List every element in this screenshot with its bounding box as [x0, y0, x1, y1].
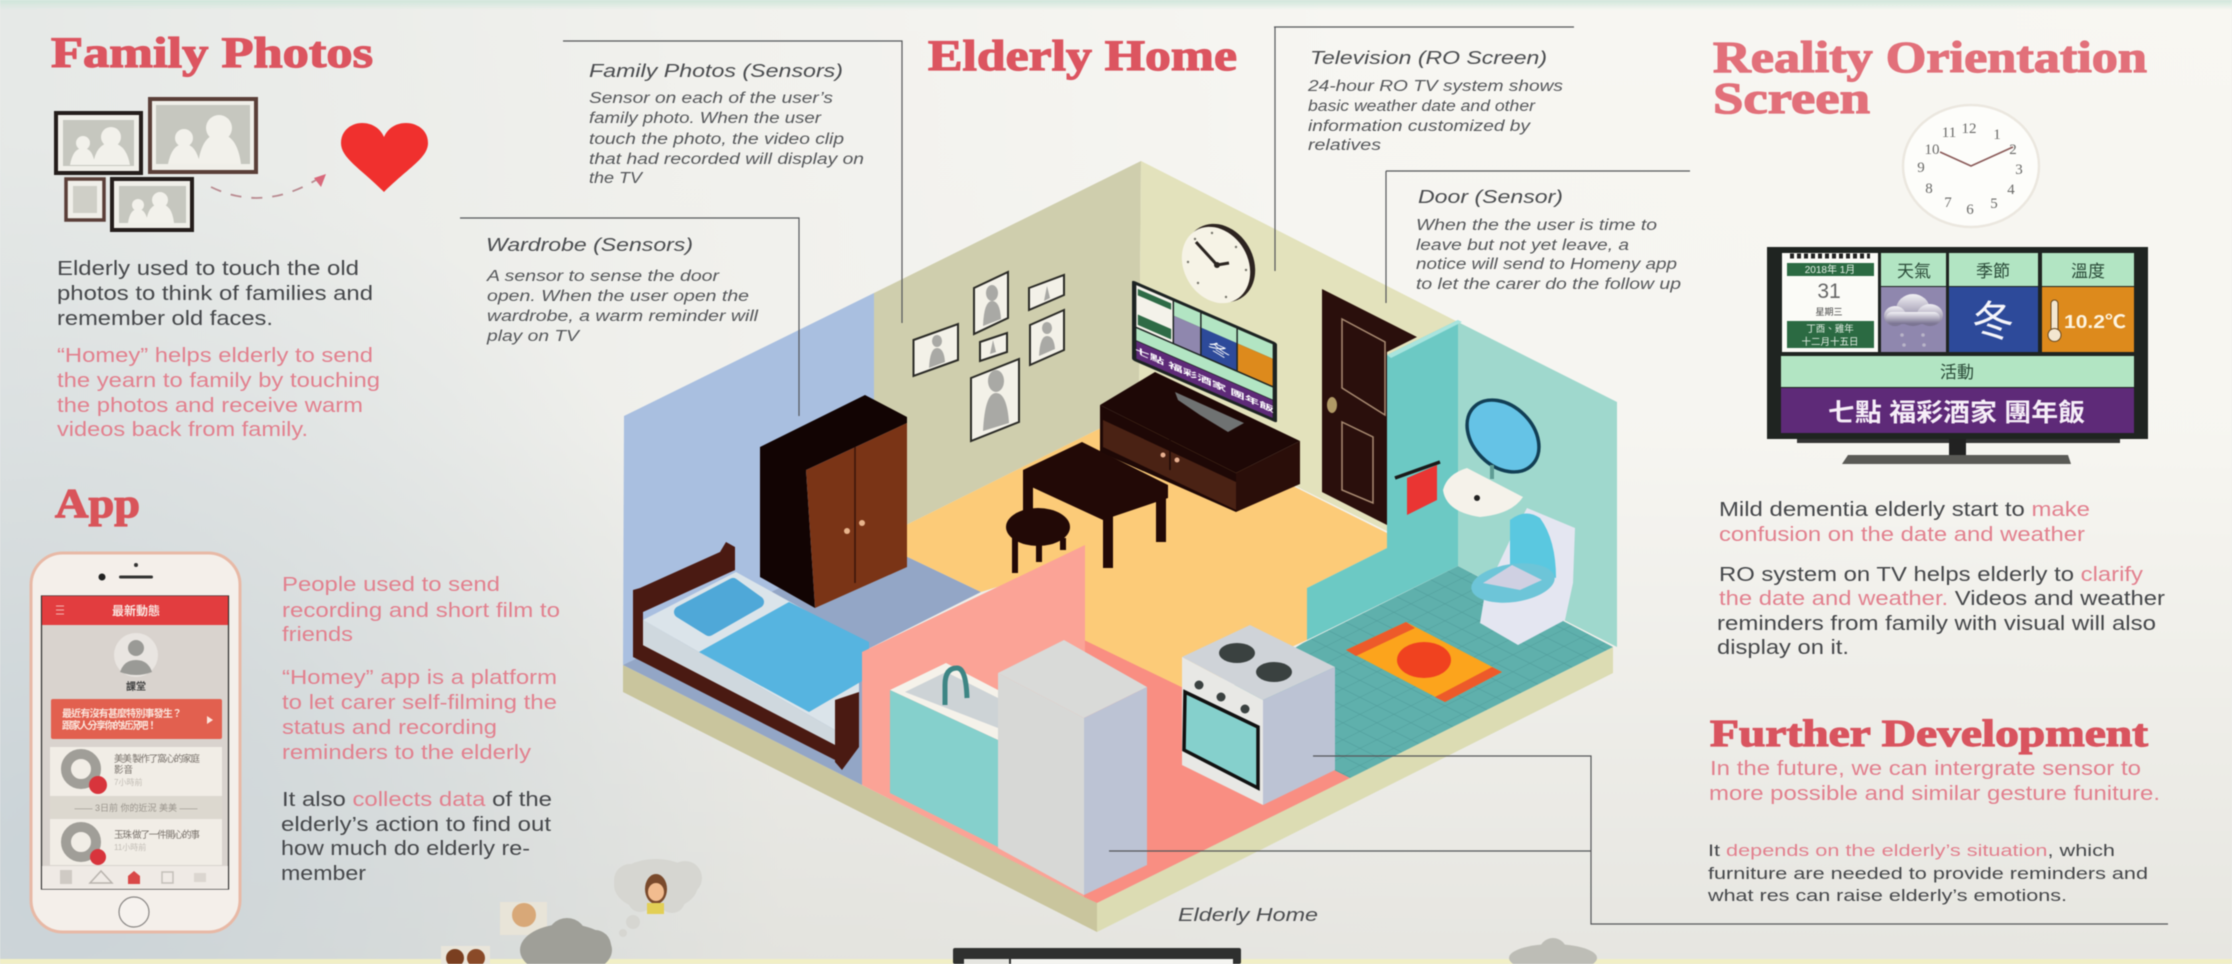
- text: app body: It also collects data of the: [282, 788, 552, 811]
- tv with ro screen: 丁酉、雞年: [1806, 323, 1854, 335]
- callout: wardrobe sensors: wardrobe, a warm reminder will: [487, 308, 759, 325]
- icon: analog clock: 4: [2007, 182, 2015, 198]
- text: ro description: Mild dementia elderly start to make: [1719, 498, 2090, 521]
- tv screen in room: 七點 福彩酒家 團年飯: [1135, 345, 1274, 415]
- wall clock: [1168, 211, 1269, 316]
- thought cloud: grey: [520, 918, 612, 964]
- callout: door sensor: When the the user is time to: [1416, 217, 1657, 234]
- tv screen in room: 冬: [1207, 338, 1231, 363]
- bed: [633, 542, 869, 770]
- text: ro description: display on it.: [1717, 636, 1849, 659]
- text: app body: People used to send: [282, 573, 500, 596]
- icon: analog clock: 11: [1942, 125, 1956, 141]
- bathroom wall: [1307, 320, 1617, 647]
- icon: analog clock: 9: [1917, 160, 1925, 176]
- door: [1322, 289, 1417, 525]
- callout: door sensor: [1416, 187, 1681, 293]
- text: family photos body: Elderly used to touch the old: [57, 257, 359, 280]
- callout: family photos sensors: the TV: [589, 170, 644, 187]
- callout: television: basic weather date and other: [1308, 98, 1536, 115]
- label: elderly home: Elderly Home: [1178, 905, 1318, 925]
- phone mockup: [31, 553, 240, 932]
- photo: elderly man: [500, 902, 547, 935]
- callout: family photos sensors: Sensor on each of the user’s: [589, 90, 833, 107]
- thought cloud: woman: [614, 859, 702, 937]
- text: ro description: confusion on the date and weather: [1719, 523, 2085, 546]
- room base: [623, 647, 1613, 932]
- icon: analog clock: 10: [1924, 142, 1940, 158]
- heading: reality orientation screen: [1713, 33, 2147, 123]
- panel: family photos: [51, 30, 428, 441]
- callout: television: relatives: [1308, 137, 1381, 154]
- text: family photos body: videos back from family.: [57, 418, 308, 441]
- text: further development body: It depends on the elderly’s situation , which: [1708, 841, 2115, 860]
- towel: [1395, 462, 1440, 515]
- phone mockup: —— 3日前 你的近況 美美 ——: [74, 802, 198, 813]
- tv with ro screen: 十二月十五日: [1801, 336, 1859, 348]
- text: app body: how much do elderly re-: [281, 837, 530, 860]
- tv screen in room: [1132, 280, 1277, 423]
- phone mockup: 玉珠 做了一件開心的事: [114, 829, 200, 841]
- callout: family photos sensors: that had recorded will display on: [589, 151, 864, 168]
- panel: reality orientation screen: [1713, 33, 2165, 659]
- text: further development body: In the future, we can intergrate sensor to: [1710, 757, 2141, 780]
- photo: two children: [441, 946, 490, 964]
- icon: analog clock: 5: [1990, 196, 1998, 212]
- bath mat: [1346, 622, 1502, 702]
- text: further development body: furniture are needed to provide reminders and: [1708, 864, 2148, 883]
- icon: analog clock: [1903, 105, 2039, 227]
- icon: analog clock: 6: [1966, 202, 1974, 218]
- callout: door sensor: to let the carer do the follow up: [1416, 276, 1681, 293]
- callout: family photos sensors: Family Photos (Sensors): [589, 61, 843, 81]
- television unit: [1100, 280, 1300, 512]
- heading: elderly home: Elderly Home: [928, 33, 1237, 80]
- icon: analog clock: 1: [1993, 127, 2001, 143]
- heading: reality orientation screen: Screen: [1713, 74, 1870, 123]
- text: family photos body: remember old faces.: [57, 307, 273, 330]
- callout: wardrobe sensors: A sensor to sense the door: [486, 268, 720, 285]
- phone mockup: 影音: [114, 764, 133, 776]
- text: app body: reminders to the elderly: [282, 741, 532, 764]
- callout: door sensor: Door (Sensor): [1418, 187, 1563, 207]
- text: app body: to let carer self-filming the: [282, 691, 557, 714]
- icon: analog clock: 7: [1944, 195, 1952, 211]
- text: app body: recording and short film to: [282, 599, 560, 622]
- thought bubbles along the bottom: [441, 859, 1597, 964]
- isometric room: [623, 161, 1617, 932]
- callout: television: 24-hour RO TV system shows: [1307, 78, 1563, 95]
- tv with ro screen: 溫度: [2071, 262, 2105, 281]
- fridge: [998, 640, 1147, 895]
- text: ro description: RO system on TV helps elderly to clarify: [1719, 563, 2144, 586]
- stool: [1006, 508, 1070, 573]
- text: family photos body: the photos and receive warm: [57, 394, 363, 417]
- text: app body: “Homey” app is a platform: [282, 666, 557, 689]
- arrow: dashed curve to heart: [211, 174, 326, 198]
- tv with ro screen: 活動: [1940, 363, 1974, 382]
- phone mockup: 最近有沒有甚麼特別事發生？: [62, 707, 182, 720]
- callout: door sensor: leave but not yet leave, a: [1416, 237, 1629, 254]
- heading: app: App: [55, 480, 140, 526]
- text: app body: elderly’s action to find out: [281, 813, 551, 836]
- thought cloud: right: [1509, 938, 1597, 964]
- heading: reality orientation screen: Reality Orientation: [1713, 33, 2147, 82]
- text: family photos body: photos to think of families and: [57, 282, 373, 305]
- text: family photos body: “Homey” helps elderly to send: [57, 344, 373, 367]
- phone mockup: 跟家人分享你的近況吧！: [62, 719, 157, 732]
- kitchen wall: [862, 545, 1085, 897]
- tv with ro screen: 10.2℃: [2064, 312, 2126, 332]
- phone mockup: 7小時前: [114, 777, 142, 787]
- sink counter: [890, 663, 998, 847]
- panel: app: [31, 480, 560, 932]
- toilet: [1469, 508, 1575, 645]
- phone mockup: 11小時前: [114, 842, 146, 852]
- table: [1023, 442, 1168, 568]
- text: app body: friends: [282, 623, 353, 646]
- device at bottom: [953, 948, 1241, 964]
- wall photos: [914, 272, 1064, 441]
- callout: wardrobe sensors: [486, 235, 759, 345]
- mirror: [1453, 386, 1553, 486]
- callout: door sensor: notice will send to Homeny app: [1416, 256, 1677, 273]
- tv with ro screen: 季節: [1976, 262, 2010, 281]
- text: family photos body: [57, 257, 380, 441]
- phone mockup: 最新動態: [112, 603, 160, 618]
- callout: wardrobe sensors: open. When the user open the: [487, 288, 749, 305]
- phone mockup: 課堂: [126, 680, 146, 693]
- callout: family photos sensors: [589, 61, 864, 187]
- callout: wardrobe sensors: play on TV: [486, 328, 581, 345]
- icon: photo frames: [56, 99, 256, 230]
- tv with ro screen: [1767, 247, 2148, 464]
- text: app body: member: [281, 862, 366, 885]
- callout: wardrobe sensors: Wardrobe (Sensors): [486, 235, 693, 255]
- phone mockup: 美美 製作了窩心的家庭: [114, 753, 200, 765]
- wash basin: [1443, 465, 1523, 517]
- heading: family photos: Family Photos: [51, 30, 373, 77]
- tv with ro screen: 天氣: [1897, 262, 1931, 281]
- callout: television: Television (RO Screen): [1310, 48, 1547, 68]
- text: ro description: reminders from family with visual will also: [1717, 612, 2156, 635]
- text: further development body: more possible and similar gesture funiture.: [1709, 782, 2160, 805]
- walls: [623, 161, 1458, 665]
- tv with ro screen: 七點 福彩酒家 團年飯: [1828, 399, 2085, 427]
- stove: [1182, 625, 1335, 805]
- tv with ro screen: 31: [1817, 280, 1841, 303]
- icon: analog clock: 3: [2015, 162, 2023, 178]
- floors: [623, 409, 1613, 903]
- text: ro description: the date and weather. Videos and weather: [1719, 587, 2165, 610]
- tv with ro screen: 冬: [1972, 298, 2014, 345]
- icon: analog clock: 12: [1962, 121, 1976, 137]
- icon: analog clock: 8: [1925, 181, 1933, 197]
- icon: analog clock: 2: [2009, 142, 2017, 158]
- text: app body: [281, 573, 560, 885]
- tv with ro screen: 2018年 1月: [1805, 263, 1855, 276]
- text: further development body: [1707, 757, 2160, 905]
- callout: family photos sensors: family photo. When the user: [589, 110, 822, 127]
- callout: television: information customized by: [1308, 118, 1532, 135]
- text: app body: status and recording: [282, 716, 497, 739]
- text: ro description: [1717, 498, 2165, 659]
- callout: family photos sensors: touch the photo, the video clip: [589, 131, 844, 148]
- tv with ro screen: 星期三: [1815, 307, 1843, 317]
- icon: heart: [341, 123, 428, 192]
- panel: further development: [1707, 713, 2160, 905]
- wardrobe: [760, 395, 907, 608]
- leader lines: [460, 27, 2168, 924]
- heading: further development: Further Development: [1710, 713, 2148, 755]
- callout: television: [1307, 48, 1563, 154]
- text: family photos body: the yearn to family by touching: [57, 369, 380, 392]
- text: further development body: what res can raise elderly’s emotions.: [1707, 886, 2067, 905]
